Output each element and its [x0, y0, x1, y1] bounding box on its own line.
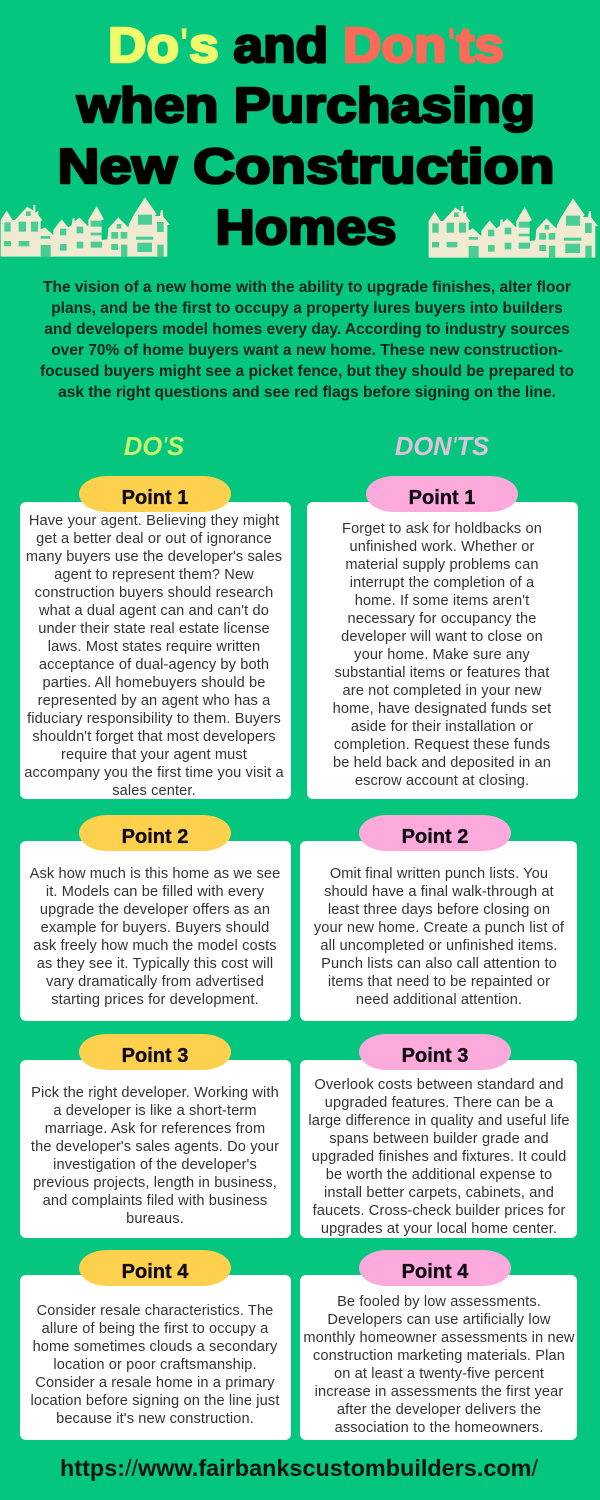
panel: do point 3: and complaints filed with business [43, 1193, 267, 1209]
panel: don't point 2 [300, 815, 577, 1021]
panel: don't point 1: home. If some items aren't [355, 593, 529, 609]
panel: don't point 4: monthly homeowner assessments in new [303, 1330, 575, 1346]
panel: do point 4: Consider resale characteristics. The [37, 1303, 273, 1319]
panel: don't point 1: substantial items or features that [335, 665, 549, 681]
panel: do point 3 [20, 1034, 291, 1238]
panel: do point 1: parties. All homebuyers should be [42, 675, 266, 691]
intro text: over 70% of home buyers want a new home. These new construction- [51, 342, 563, 359]
panel: do point 1: construction buyers should research [35, 585, 273, 601]
intro text: ask the right questions and see red flags before signing on the line. [58, 384, 556, 401]
panel: do point 1: shouldn't forget that most developers [32, 729, 276, 745]
panel: don't point 1: home, have designated funds set [333, 701, 551, 717]
panel: do point 4: Point 4 [122, 1261, 189, 1283]
panel: do point 1: accompany you the first time you visit a [24, 765, 284, 781]
panel: don't point 1: interrupt the completion of a [350, 575, 535, 591]
panel: do point 1: get a better deal or out of ignorance [36, 531, 272, 547]
panel: don't point 1: Point 1 [409, 487, 475, 509]
panel: don't point 2: Punch lists can also call attention to [321, 956, 557, 972]
panel: do point 3: marriage. Ask for references from [45, 1121, 265, 1137]
title: Do's and Don'ts [108, 19, 504, 73]
panel: don't point 4: association to the homeowners. [335, 1420, 543, 1436]
panel: do point 1: sales center. [112, 783, 196, 799]
panel: do point 2: as they see it. Typically this cost will [37, 956, 273, 972]
panel: don't point 1: unfinished work. Whether or [350, 539, 534, 555]
panel: don't point 1 [307, 476, 578, 799]
panel: do point 4 [20, 1250, 291, 1440]
title [58, 19, 554, 255]
intro text [40, 279, 574, 401]
panel: don't point 4: after the developer delivers the [337, 1402, 541, 1418]
panel: do point 1: Have your agent. Believing they might [29, 513, 279, 529]
panel: do point 3: bureaus. [126, 1211, 184, 1227]
panel: don't point 3: install better carpets, cabinets, and [324, 1185, 554, 1201]
panel: do point 1: many buyers use the developer's sales [26, 549, 282, 565]
heading: don'ts: DON'TS [395, 433, 489, 461]
panel: do point 1: laws. Most states require written [48, 639, 260, 655]
panel: do point 4: allure of being the first to occupy a [42, 1321, 269, 1337]
panel: do point 1: Point 1 [122, 487, 188, 509]
panel: do point 3: the developer's sales agents. Do your [31, 1139, 279, 1155]
panel: don't point 3: upgraded finishes and fixtures. It could [312, 1149, 566, 1165]
panel: do point 4: home sometimes clouds a secondary [33, 1339, 278, 1355]
panel: do point 3: a developer is like a short-term [53, 1103, 257, 1119]
panel: do point 1: acceptance of dual-agency by both [39, 657, 269, 673]
panel: do point 3: investigation of the developer's [53, 1157, 257, 1173]
panel: don't point 1: aside for their installation or [351, 719, 533, 735]
panel: do point 2: upgrade the developer offers as an [40, 902, 270, 918]
title: Homes [216, 201, 396, 255]
panel: don't point 3: Point 3 [402, 1045, 468, 1067]
intro text: The vision of a new home with the ability to upgrade finishes, alter floor [43, 279, 571, 296]
intro text: and developers model homes every day. According to industry sources [44, 321, 570, 338]
panel: don't point 4: on at least a twenty-five percent [334, 1366, 544, 1382]
panel: don't point 2: Omit final written punch lists. You [330, 866, 548, 882]
panel: do point 4: location before signing on the line just [30, 1393, 280, 1409]
panel: don't point 4 [300, 1250, 577, 1440]
panel: do point 4: location or poor craftsmanship. [53, 1357, 257, 1373]
panel: don't point 4: Developers can use artificially low [327, 1312, 551, 1328]
intro text: focused buyers might see a picket fence, but they should be prepared to [40, 363, 574, 380]
panel: do point 1 [20, 476, 291, 799]
icon: houses left [1, 197, 170, 257]
panel: do point 1: require that your agent must [61, 747, 247, 763]
panel: do point 2 [20, 815, 291, 1021]
panel: do point 4: Consider a resale home in a primary [35, 1375, 275, 1391]
panel: don't point 2: all uncompleted or unfinished items. [320, 938, 558, 954]
icon: houses right [429, 198, 598, 258]
panel: don't point 1: completion. Request these funds [334, 737, 550, 753]
panel: do point 1: what a dual agent can and can't do [38, 603, 269, 619]
panel: don't point 1: Forget to ask for holdbacks on [342, 521, 542, 537]
panel: do point 1: under their state real estate license [38, 621, 270, 637]
panel: do point 4: because it's new construction. [56, 1411, 254, 1427]
panel: don't point 3: upgrades at your local home center. [321, 1221, 557, 1237]
panel: don't point 3: upgraded features. There can be a [325, 1095, 554, 1111]
panel: don't point 4: construction marketing materials. Plan [313, 1348, 565, 1364]
title: when Purchasing [76, 79, 535, 133]
panel: don't point 3 [300, 1034, 577, 1238]
panel: do point 2: Point 2 [122, 826, 188, 848]
title: New Construction [58, 140, 554, 194]
panel: don't point 2: items that need to be repainted or [328, 974, 550, 990]
panel: don't point 1: material supply problems can [345, 557, 539, 573]
panel: don't point 3: be worth the additional expense to [326, 1167, 552, 1183]
panel: don't point 1: your home. Make sure any [354, 647, 530, 663]
panel: do point 3: Point 3 [122, 1045, 188, 1067]
panel: do point 3: Pick the right developer. Working with [31, 1085, 279, 1101]
panel: don't point 4: Be fooled by low assessments. [337, 1294, 541, 1310]
panel: don't point 2: your new home. Create a punch list of [314, 920, 565, 936]
panel: don't point 2: should have a final walk-through at [324, 884, 554, 900]
panel: don't point 2: need additional attention. [356, 992, 522, 1008]
panel: don't point 2: least three days before closing on [328, 902, 550, 918]
panel: don't point 1: be held back and deposited in an [333, 755, 551, 771]
heading: do's: DO'S [124, 433, 184, 461]
panel: don't point 3: spans between builder grade and [329, 1131, 549, 1147]
panel: don't point 1: developer will want to close on [341, 629, 543, 645]
panel: don't point 4: Point 4 [402, 1261, 469, 1283]
intro text: plans, and be the first to occupy a property lures buyers into builders [51, 300, 563, 317]
panel: do point 2: example for buyers. Buyers should [41, 920, 269, 936]
panel: don't point 2: Point 2 [402, 826, 468, 848]
panel: do point 2: it. Models can be filled with every [46, 884, 265, 900]
panel: don't point 1: necessary for occupancy the [347, 611, 537, 627]
panel: don't point 3: Overlook costs between standard and [314, 1077, 564, 1093]
panel: do point 2: starting prices for development. [51, 992, 259, 1008]
panel: don't point 4: increase in assessments the first year [315, 1384, 563, 1400]
panel: do point 2: Ask how much is this home as we see [30, 866, 280, 882]
panel: do point 1: fiduciary responsibility to them. Buyers [27, 711, 281, 727]
panel: do point 1: agent to represent them? New [54, 567, 254, 583]
panel: do point 2: ask freely how much the model costs [33, 938, 277, 954]
panel: don't point 3: faucets. Cross-check builder prices for [313, 1203, 565, 1219]
panel: don't point 1: are not completed in your new [342, 683, 542, 699]
footer url: https://www.fairbankscustombuilders.com / [60, 1455, 539, 1481]
panel: do point 3: previous projects, length in business, [33, 1175, 277, 1191]
panel: don't point 3: large difference in quality and useful life [308, 1113, 570, 1129]
panel: do point 2: vary dramatically from advertised [46, 974, 264, 990]
panel: do point 1: represented by an agent who has a [38, 693, 271, 709]
panel: don't point 1: escrow account at closing. [355, 773, 529, 789]
